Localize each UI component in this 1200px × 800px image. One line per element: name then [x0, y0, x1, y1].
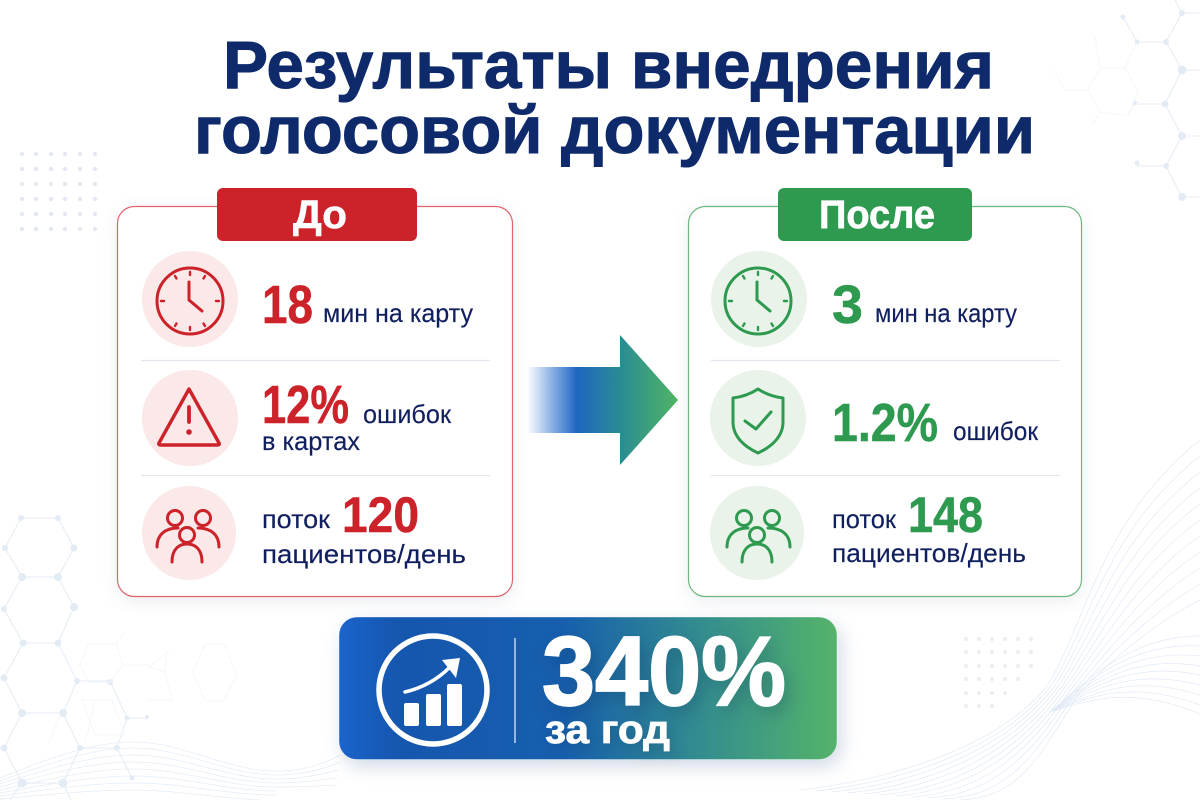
result banner: [339, 616, 837, 760]
stat: 12 percent errors: ошибок: [363, 399, 452, 429]
stat: 18 minutes: мин на карту: [323, 298, 473, 328]
stat: 3 minutes: 3: [832, 275, 863, 335]
stat: flow 120 patients per day: пациентов/день: [262, 539, 466, 569]
stat: 1.2 percent errors: [832, 393, 1039, 453]
panel: after: [688, 188, 1082, 596]
stat: 18 minutes: 18: [262, 275, 313, 335]
stat: 18 minutes: [262, 275, 473, 335]
stat: 1.2 percent errors: ошибок: [953, 416, 1039, 446]
icon: clock red: [142, 251, 238, 347]
stat: flow 120 patients per day: поток: [262, 504, 331, 534]
icon: shield green: [710, 370, 806, 466]
badge: before: [217, 188, 417, 241]
value: 340 percent: 340%: [542, 616, 786, 726]
title: [194, 28, 1035, 168]
stat: 12 percent errors: в картах: [262, 426, 360, 456]
icon: clock green: [711, 251, 807, 347]
badge: after: После: [819, 193, 935, 237]
title: голосовой документации: [194, 93, 1035, 168]
stat: 12 percent errors: [262, 375, 452, 456]
badge: before: До: [293, 193, 347, 237]
panel: before: [118, 188, 512, 596]
stat: flow 120 patients per day: 120: [342, 487, 419, 543]
stat: flow 148 patients per day: 148: [908, 487, 983, 543]
stat: 3 minutes: [832, 275, 1017, 335]
stat: 3 minutes: мин на карту: [875, 298, 1017, 328]
arrow: [527, 335, 678, 465]
icon: warning red: [142, 370, 238, 466]
badge: after: [778, 188, 972, 241]
icon: patients red: [142, 486, 236, 580]
icon: growth chart: [379, 636, 487, 744]
stat: flow 148 patients per day: пациентов/день: [832, 538, 1026, 568]
label: per year: за год: [545, 708, 670, 752]
icon: patients green: [710, 486, 804, 580]
stat: 1.2 percent errors: 1.2%: [832, 393, 938, 453]
stat: flow 148 patients per day: [832, 487, 1026, 568]
stat: flow 148 patients per day: поток: [832, 504, 897, 534]
stat: flow 120 patients per day: [262, 487, 466, 569]
stat: 12 percent errors: 12%: [262, 375, 349, 435]
title: Результаты внедрения: [223, 28, 994, 103]
